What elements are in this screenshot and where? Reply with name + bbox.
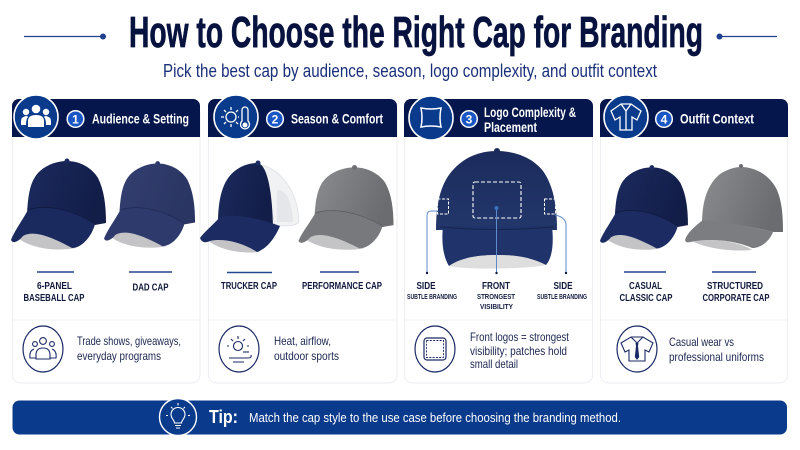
label: trucker cap: TRUCKER CAP xyxy=(221,280,277,292)
cap: trucker cap xyxy=(200,160,299,252)
label: 6-panel baseball cap xyxy=(24,272,84,304)
cap: performance cap xyxy=(298,165,394,250)
panel: season and comfort xyxy=(200,95,397,383)
title accent: right line and dot xyxy=(716,34,777,40)
subtitle: Pick the best cap by audience, season, logo complexity, and outfit context xyxy=(163,61,657,81)
panel header: logo complexity and placement: Logo Complexity & xyxy=(484,105,576,120)
logo zone: left side xyxy=(438,199,448,214)
text: outfit usage xyxy=(669,335,764,364)
panel header: season and comfort: 2 xyxy=(272,112,279,126)
panel header: audience and setting: 1 xyxy=(72,112,79,126)
label: 6-panel baseball cap: BASEBALL CAP xyxy=(24,292,84,304)
label: right side placement: SUBTLE BRANDING xyxy=(537,294,587,301)
title accent: left line and dot xyxy=(24,34,106,40)
label: left side placement: SUBTLE BRANDING xyxy=(407,294,457,301)
panel header: logo complexity and placement xyxy=(404,96,593,140)
text: outfit usage: Casual wear vs xyxy=(669,335,734,349)
cap: casual classic cap xyxy=(600,165,688,250)
icon: light bulb xyxy=(160,398,196,436)
cap: 6-panel baseball cap xyxy=(11,158,106,250)
label: front placement: VISIBILITY xyxy=(480,304,513,311)
label: structured corporate cap: CORPORATE CAP xyxy=(702,292,770,304)
panel: audience and setting xyxy=(11,95,200,383)
panel header: logo complexity and placement: 3 xyxy=(466,112,473,126)
text: season usage: outdoor sports xyxy=(274,349,339,363)
panel header: audience and setting xyxy=(12,95,200,139)
icon: people outline xyxy=(23,326,63,372)
label: left side placement xyxy=(407,280,457,301)
label: casual classic cap: CLASSIC CAP xyxy=(620,292,672,304)
panel: outfit context xyxy=(600,95,788,383)
text: audience usage: everyday programs xyxy=(77,349,161,363)
cap: dad cap xyxy=(104,161,195,248)
text: season usage: Heat, airflow, xyxy=(274,334,331,348)
leader lines to placement labels xyxy=(426,206,567,274)
logo zone: right side xyxy=(544,199,556,214)
cap: structured corporate cap xyxy=(685,164,783,251)
tip label: Tip: xyxy=(209,407,238,427)
panel header: outfit context xyxy=(600,95,788,139)
label: performance cap: PERFORMANCE CAP xyxy=(302,280,382,292)
label: right side placement xyxy=(537,280,587,301)
panel header: audience and setting: Audience & Setting xyxy=(92,112,189,126)
icon: sun and wind xyxy=(219,326,259,372)
label: left side placement: SIDE xyxy=(416,280,436,292)
text: logo guidance: Front logos = strongest xyxy=(470,330,570,344)
tip banner xyxy=(12,398,787,436)
label: casual classic cap xyxy=(620,272,672,304)
panel header: logo complexity and placement: Placement xyxy=(484,120,537,135)
label: structured corporate cap xyxy=(702,272,770,304)
text: logo guidance: small detail xyxy=(470,357,518,371)
label: casual classic cap: CASUAL xyxy=(629,280,662,292)
panel header: outfit context: Outfit Context xyxy=(680,112,754,126)
label: right side placement: SIDE xyxy=(554,280,572,292)
text: logo guidance xyxy=(470,330,570,371)
text: season usage xyxy=(274,334,339,363)
icon: shirt and tie xyxy=(617,326,657,372)
panel header: season and comfort: Season & Comfort xyxy=(291,112,383,126)
text: audience usage: Trade shows, giveaways, xyxy=(77,334,181,348)
cap: front view with logo zones xyxy=(436,148,557,269)
tip text: Match the cap style to the use case before choosing the branding method. xyxy=(249,410,621,425)
logo zone: front xyxy=(473,182,521,218)
icon: stitched patch xyxy=(415,326,455,372)
label: dad cap xyxy=(129,272,172,294)
panel: logo complexity and placement xyxy=(404,96,593,383)
label: front placement: STRONGEST xyxy=(477,294,516,301)
label: dad cap: DAD CAP xyxy=(132,282,168,294)
text: outfit usage: professional uniforms xyxy=(669,350,764,364)
label: performance cap xyxy=(302,272,382,292)
panel header: outfit context: 4 xyxy=(661,112,668,126)
label: 6-panel baseball cap: 6-PANEL xyxy=(37,280,72,292)
label: front placement: FRONT xyxy=(482,280,510,292)
label: front placement xyxy=(477,280,516,311)
panel header: season and comfort xyxy=(208,95,397,139)
text: logo guidance: visibility; patches hold xyxy=(470,344,567,358)
text: audience usage xyxy=(77,334,181,363)
label: structured corporate cap: STRUCTURED xyxy=(707,280,763,292)
label: trucker cap xyxy=(221,272,277,292)
